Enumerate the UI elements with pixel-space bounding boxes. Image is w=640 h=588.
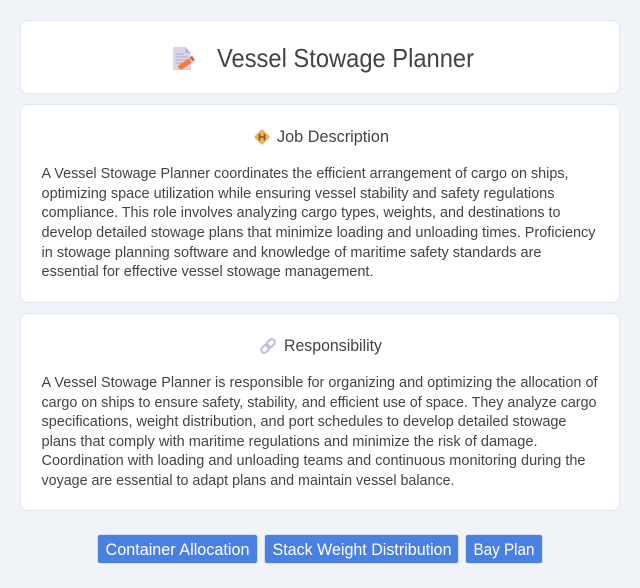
tag: bay plan: Bay Plan (474, 540, 534, 559)
job description text: optimizing space utilization while ensuring vessel stability and safety regulations (42, 186, 554, 202)
panel: job description (20, 104, 620, 303)
tag: container allocation: Container Allocation (106, 540, 250, 559)
responsibility text: voyage are essential to adapt plans and maintain vessel balance. (42, 473, 454, 489)
icon: document with pencil (173, 47, 195, 70)
job description text: develop detailed stowage plans that minimize loading and unloading times. Proficiency (42, 225, 596, 241)
icon: chain link (260, 338, 276, 354)
responsibility text: plans that comply with maritime regulations and minimize the risk of damage. (42, 434, 538, 450)
tag: stack weight distribution: Stack Weight Distribution (272, 540, 452, 559)
job description text: essential for effective vessel stowage management. (42, 264, 374, 280)
responsibility text: Coordination with loading and unloading teams and continuous monitoring during the (42, 453, 586, 469)
icon: road sign diamond (254, 129, 270, 145)
responsibility text (42, 375, 598, 489)
tag: container allocation (97, 534, 258, 564)
job description text: in stowage planning software and knowledge of maritime safety standards are (42, 245, 542, 261)
responsibility text: cargo on ships to ensure safety, stability, and efficient use of space. They analyze cargo (42, 395, 596, 411)
heading: responsibility: Responsibility (284, 336, 383, 355)
responsibility text: specifications, weight distribution, and port schedules to develop detailed stowage (42, 414, 566, 430)
tag: stack weight distribution (264, 534, 459, 564)
title card (20, 20, 620, 94)
job description text: A Vessel Stowage Planner coordinates the efficient arrangement of cargo on ships, (42, 166, 568, 182)
job description text (42, 166, 596, 280)
job description text: compliance. This role involves analyzing cargo types, weights, and destinations to (42, 205, 560, 221)
heading: job description: Job Description (277, 127, 389, 146)
tag: bay plan (465, 534, 543, 564)
title: Vessel Stowage Planner (217, 43, 474, 73)
panel: responsibility (20, 313, 620, 511)
responsibility text: A Vessel Stowage Planner is responsible for organizing and optimizing the allocation of (42, 375, 598, 391)
